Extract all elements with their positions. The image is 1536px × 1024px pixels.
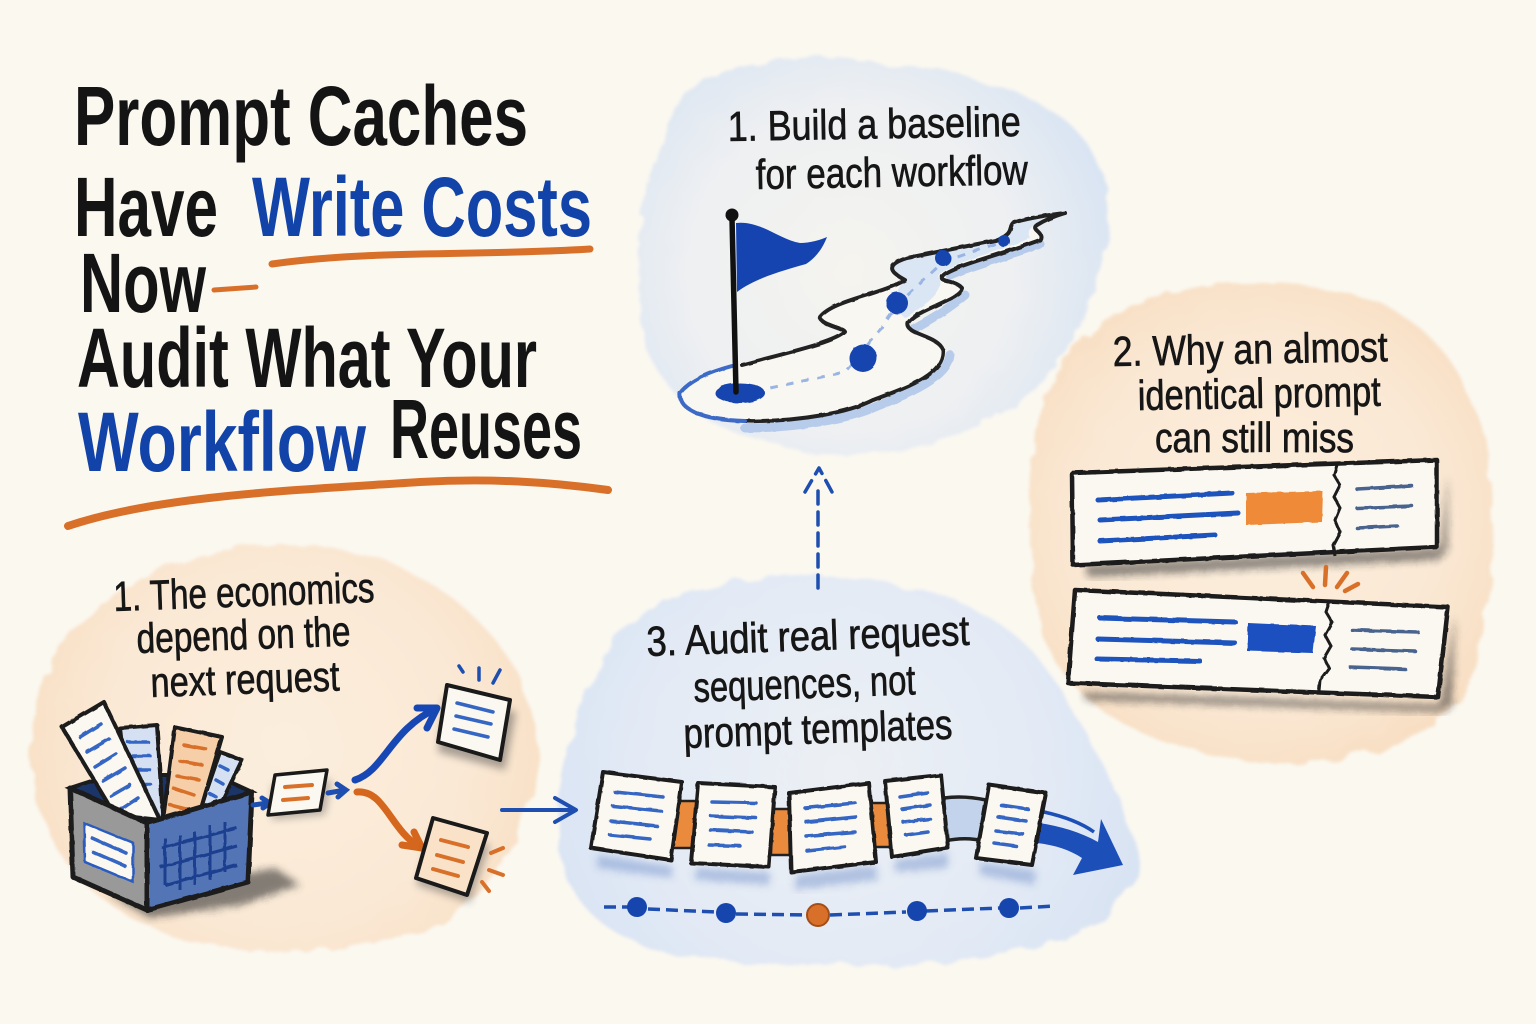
arrow: audit to baseline <box>805 468 832 588</box>
request pages <box>591 772 1046 890</box>
icon: flag <box>726 208 827 392</box>
icon: single request page <box>268 770 332 820</box>
panel: orange blob, near-identical prompt <box>1030 282 1493 762</box>
panel: orange blob, economics <box>32 544 537 951</box>
heading: economics: depend on the <box>136 608 351 662</box>
arrow: economics to audit <box>502 798 576 822</box>
icon: cache miss page <box>416 818 503 903</box>
section 3 audit <box>591 607 1123 926</box>
section 1 left <box>62 564 516 918</box>
prompt strip: orange change <box>1072 460 1448 577</box>
title highlight: Workflow: Workflow <box>78 395 366 489</box>
heading: near-identical <box>1112 323 1388 461</box>
title line 1: Prompt Caches <box>74 69 528 163</box>
orange dash <box>214 287 256 290</box>
icon: box of documents <box>62 702 300 918</box>
title line 3: Now <box>80 236 206 330</box>
heading: economics: 1. The economics <box>113 564 375 620</box>
heading: audit <box>646 607 970 757</box>
arrow: sequence sweep <box>944 797 1123 875</box>
arrow: miss branch <box>357 792 422 848</box>
underline: title <box>68 480 608 526</box>
section baseline <box>680 98 1065 428</box>
title highlight: Write Costs: Write Costs <box>252 160 592 254</box>
title line 2: Have <box>74 160 218 254</box>
title line 4: Audit What Your <box>77 311 537 405</box>
underline: Write Costs <box>272 249 590 264</box>
heading: economics <box>113 564 375 706</box>
heading: near-identical: 2. Why an almost <box>1112 323 1388 375</box>
heading: baseline <box>727 98 1029 198</box>
arrow: page to fork <box>328 784 346 797</box>
title word: Reuses: Reuses <box>390 382 582 476</box>
icon: spark <box>1303 567 1358 591</box>
arrow: hit branch <box>355 708 437 780</box>
heading: economics: next request <box>150 652 340 706</box>
panel: blue blob, audit <box>558 576 1139 966</box>
section 2 right <box>1068 323 1455 712</box>
heading: audit: sequences, not <box>693 656 916 711</box>
connectors between pages <box>672 801 890 855</box>
arrow: box to page <box>253 798 270 808</box>
heading: baseline: for each workflow <box>755 146 1029 198</box>
path illustration <box>680 213 1065 428</box>
heading: audit: 3. Audit real request <box>646 607 970 665</box>
heading: near-identical: identical prompt <box>1137 368 1381 419</box>
icon: cache hit page <box>438 666 516 770</box>
heading: near-identical: can still miss <box>1155 414 1354 461</box>
title <box>68 69 608 526</box>
prompt strip: blue change <box>1068 590 1455 712</box>
heading: audit: prompt templates <box>683 701 953 757</box>
timeline <box>604 897 1054 926</box>
panel: blue blob, baseline <box>639 58 1108 455</box>
heading: baseline: 1. Build a baseline <box>727 98 1021 150</box>
